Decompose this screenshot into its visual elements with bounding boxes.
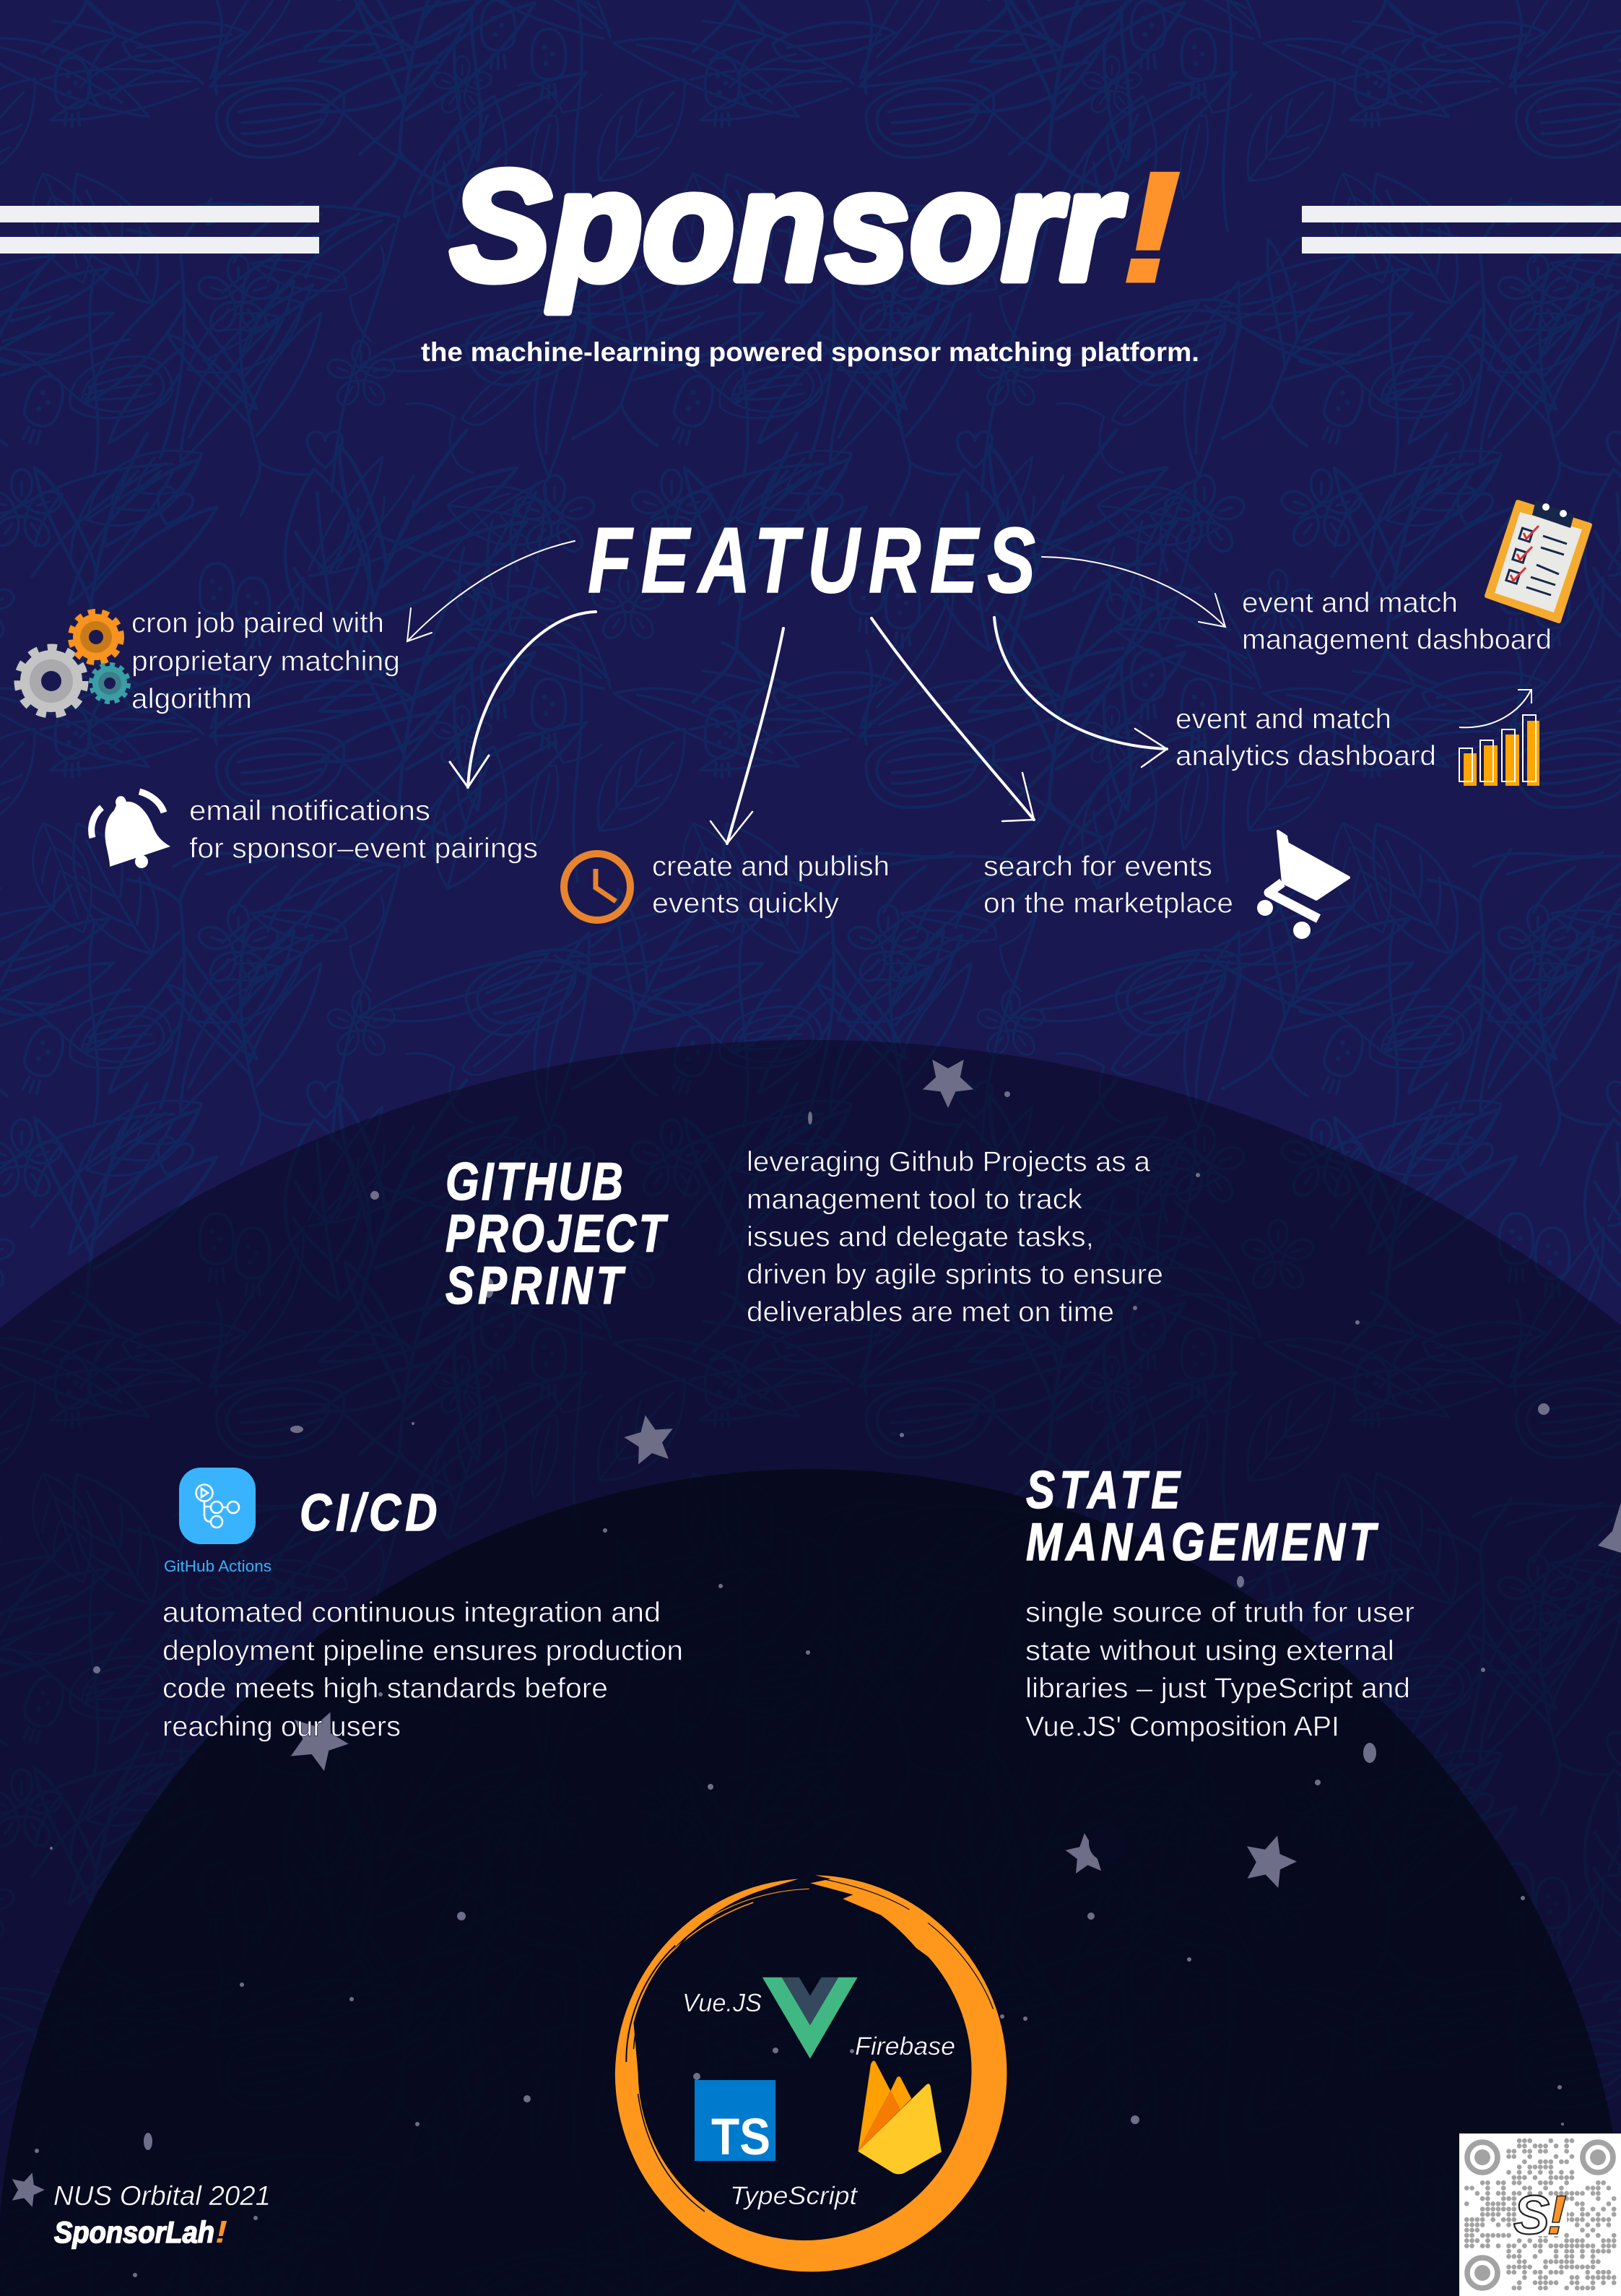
footer credit: ! <box>215 2214 227 2250</box>
arrow: to marketplace <box>872 618 1034 821</box>
arrow: to email notifications <box>450 612 596 787</box>
icon: bell <box>92 792 170 868</box>
title: ! <box>1121 139 1181 314</box>
arrow: to management dashboard <box>1042 557 1225 627</box>
text: github project sprint: deliverables are met on time <box>747 1297 1114 1327</box>
qr code <box>1459 2133 1621 2296</box>
heading: github project sprint: GITHUB <box>446 1153 623 1211</box>
heading: state management <box>1026 1461 1378 1572</box>
qr code: S <box>1513 2185 1550 2246</box>
text: ci/cd: code meets high standards before <box>162 1673 608 1704</box>
icon: clock <box>564 854 630 920</box>
icon: github actions <box>179 1468 256 1544</box>
text: github project sprint <box>747 1147 1163 1327</box>
text: marketplace: search for events <box>983 851 1212 883</box>
heading: state management: STATE <box>1026 1461 1181 1520</box>
text: marketplace <box>983 851 1233 919</box>
text: ci/cd: reaching our users <box>162 1712 401 1742</box>
logo: typescript <box>695 2080 775 2166</box>
text: cron job: proprietary matching <box>131 646 400 677</box>
text: management dashboard <box>1242 588 1552 656</box>
text: state management: single source of truth for user <box>1025 1598 1414 1628</box>
text: email notifications: for sponsor–event pairings <box>189 833 538 864</box>
text: state management: state without using external <box>1025 1635 1394 1667</box>
text: analytics dashboard: event and match <box>1175 703 1391 735</box>
text: create events <box>652 851 890 919</box>
label: typescript: TypeScript <box>730 2182 858 2210</box>
heading: github project sprint: SPRINT <box>446 1257 626 1315</box>
icon: shopping cart <box>1257 831 1349 939</box>
footer credit: SponsorLah <box>54 2215 214 2249</box>
text: analytics dashboard <box>1175 703 1436 771</box>
text: state management <box>1025 1598 1414 1742</box>
text: state management: Vue.JS' Composition API <box>1025 1712 1339 1742</box>
text: github project sprint: leveraging Github Projects as a <box>747 1147 1150 1177</box>
label: github actions: GitHub Actions <box>164 1557 271 1575</box>
logo: typescript: TS <box>711 2109 770 2166</box>
text: github project sprint: management tool to track <box>747 1184 1083 1215</box>
heading: state management: MANAGEMENT <box>1026 1513 1378 1572</box>
title: Sponsorr <box>451 138 1126 313</box>
heading: ci/cd: CI/CD <box>300 1484 437 1542</box>
qr code: ! <box>1547 2185 1567 2246</box>
icon: gears <box>18 612 129 714</box>
text: ci/cd: automated continuous integration and <box>162 1598 661 1628</box>
text: ci/cd: deployment pipeline ensures production <box>162 1635 683 1667</box>
heading: github project sprint <box>446 1153 669 1315</box>
logo: firebase <box>858 2061 942 2174</box>
text: email notifications <box>189 796 538 864</box>
panel: outer night sky arc <box>0 1040 1621 2296</box>
icon: clipboard <box>1487 501 1590 621</box>
label: firebase: Firebase <box>855 2032 955 2061</box>
text: github project sprint: driven by agile sprints to ensure <box>747 1260 1163 1290</box>
text: cron job: cron job paired with <box>131 608 384 638</box>
text: state management: libraries – just TypeScript and <box>1025 1673 1410 1704</box>
text: create events: events quickly <box>652 888 840 919</box>
text: management dashboard: event and match <box>1242 588 1458 618</box>
text: analytics dashboard: analytics dashboard <box>1175 741 1436 771</box>
text: marketplace: on the marketplace <box>983 888 1233 919</box>
text: ci/cd <box>162 1598 683 1742</box>
arrow: to create events <box>710 628 783 844</box>
footer credit: NUS Orbital 2021 <box>53 2181 271 2211</box>
brush ring <box>614 1875 1007 2271</box>
text: create events: create and publish <box>652 851 890 883</box>
stars and specks <box>6 1060 1621 2277</box>
text: email notifications: email notifications <box>189 796 430 826</box>
decorative bars left <box>0 206 319 254</box>
label: vue.js: Vue.JS <box>682 1989 762 2017</box>
panel: inner night sky arc <box>0 1469 1621 2296</box>
heading: github project sprint: PROJECT <box>446 1205 669 1263</box>
subtitle: the machine-learning powered sponsor matching platform. <box>421 337 1199 367</box>
decorative bars right <box>1302 206 1621 254</box>
text: cron job <box>131 608 400 715</box>
heading: features: FEATURES <box>588 508 1035 612</box>
arrow: to analytics dashboard <box>994 618 1167 767</box>
text: github project sprint: issues and delegate tasks, <box>747 1222 1094 1252</box>
footer credit <box>53 2181 271 2250</box>
text: cron job: algorithm <box>131 683 252 715</box>
icon: bar chart with arrow <box>1459 690 1539 786</box>
logo: vue.js <box>762 1977 858 2058</box>
arrow: to cron job <box>407 541 575 641</box>
text: management dashboard: management dashboard <box>1242 624 1552 656</box>
